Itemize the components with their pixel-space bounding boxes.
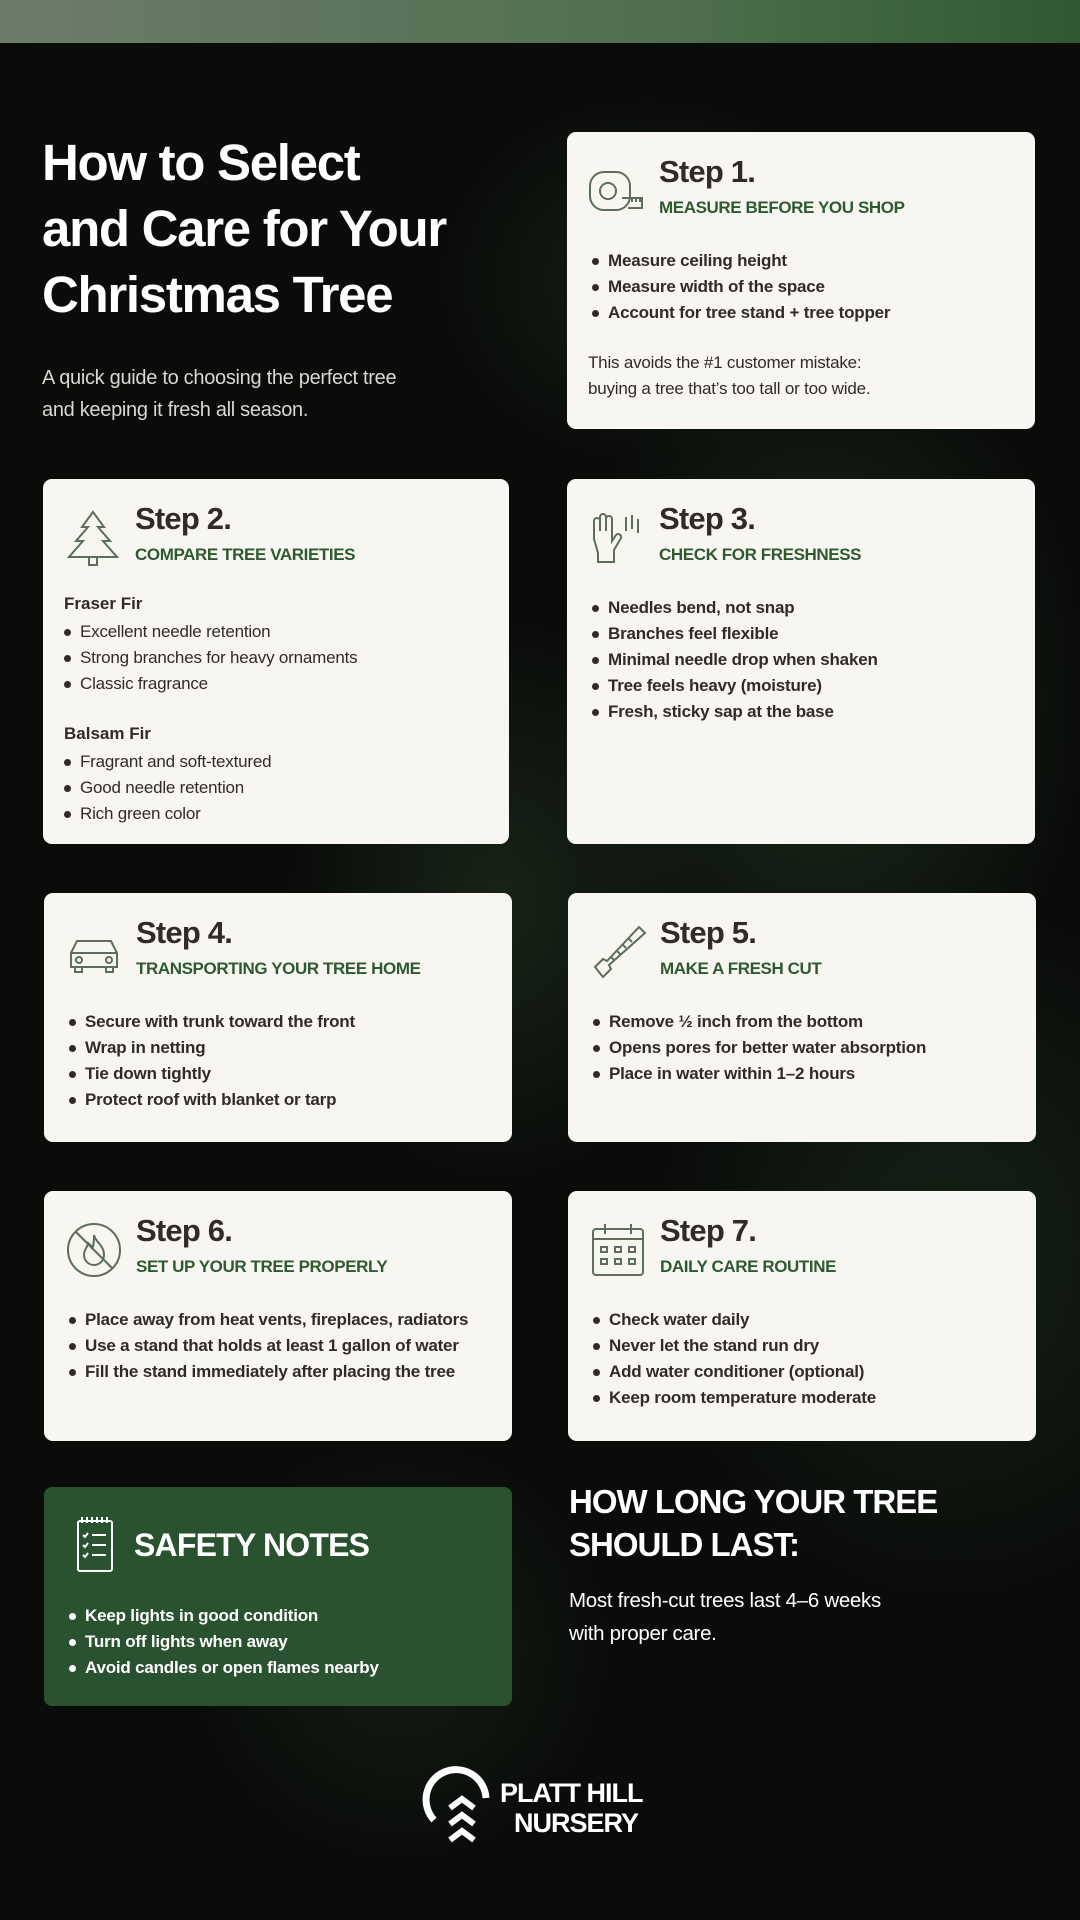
subheading: MEASURE BEFORE YOU SHOP	[659, 198, 905, 217]
bullets: Turn off lights when away	[85, 1632, 287, 1651]
icon: tree	[66, 510, 120, 566]
panel: step 2: Classic fragrance	[80, 674, 208, 693]
bullets	[593, 1310, 876, 1407]
title: Christmas Tree	[42, 266, 392, 323]
note	[588, 353, 870, 398]
subheading: COMPARE TREE VARIETIES	[135, 545, 355, 564]
subheading: SET UP YOUR TREE PROPERLY	[136, 1257, 387, 1276]
heading: Step 3.	[659, 501, 755, 536]
subtitle: and keeping it fresh all season.	[42, 399, 308, 421]
panel: step 3	[567, 479, 1035, 844]
panel: safety notes	[44, 1487, 512, 1706]
icon: gloves	[593, 513, 639, 563]
panel: step 7	[568, 1191, 1036, 1441]
bullets: Place in water within 1–2 hours	[609, 1064, 855, 1083]
bullets: Opens pores for better water absorption	[609, 1038, 926, 1057]
bullets: Fill the stand immediately after placing the tree	[85, 1362, 455, 1381]
panel: step 5	[568, 893, 1036, 1142]
callout: how long	[569, 1483, 937, 1645]
panel: step 2: Fragrant and soft-textured	[80, 752, 271, 771]
bullets	[69, 1310, 468, 1381]
callout: how long: SHOULD LAST:	[569, 1526, 799, 1563]
subheading: MAKE A FRESH CUT	[660, 959, 821, 978]
panel: step 2: Rich green color	[80, 804, 201, 823]
bullets: Add water conditioner (optional)	[609, 1362, 864, 1381]
bullets: Check water daily	[609, 1310, 749, 1329]
bullets: Minimal needle drop when shaken	[608, 650, 878, 669]
subheading: CHECK FOR FRESHNESS	[659, 545, 861, 564]
bullets: Fresh, sticky sap at the base	[608, 702, 834, 721]
title	[42, 134, 446, 323]
bullets: Measure ceiling height	[608, 251, 787, 270]
bullets: Account for tree stand + tree topper	[608, 303, 890, 322]
bullets	[592, 598, 878, 721]
panel: step 2: Good needle retention	[80, 778, 244, 797]
subtitle	[42, 367, 396, 421]
bullets: Use a stand that holds at least 1 gallon of water	[85, 1336, 459, 1355]
panel: step 6	[44, 1191, 512, 1441]
bullets	[593, 1012, 926, 1083]
bullets: Place away from heat vents, fireplaces, radiators	[85, 1310, 468, 1329]
note: buying a tree that’s too tall or too wide.	[588, 379, 870, 398]
note: This avoids the #1 customer mistake:	[588, 353, 861, 372]
heading: Step 4.	[136, 915, 232, 950]
heading: Step 1.	[659, 154, 755, 189]
bullets: Remove ½ inch from the bottom	[609, 1012, 863, 1031]
heading: SAFETY NOTES	[134, 1527, 369, 1563]
bullets: Never let the stand run dry	[609, 1336, 819, 1355]
fraser fir: Fraser Fir	[64, 594, 142, 613]
heading: Step 5.	[660, 915, 756, 950]
bullets: Measure width of the space	[608, 277, 825, 296]
title: and Care for Your	[42, 200, 446, 257]
callout: how long: with proper care.	[569, 1622, 717, 1645]
logo: PLATT HILL	[500, 1778, 642, 1808]
bullets	[69, 1606, 379, 1677]
panel: step 1	[567, 132, 1035, 429]
icon: checklist	[77, 1517, 113, 1572]
heading: Step 7.	[660, 1213, 756, 1248]
panel: step 2	[43, 479, 509, 844]
title: How to Select	[42, 134, 360, 191]
icon: car	[70, 940, 118, 973]
bullets: Branches feel flexible	[608, 624, 778, 643]
heading: Step 2.	[135, 501, 231, 536]
bullets: Tie down tightly	[85, 1064, 211, 1083]
icon: saw	[594, 926, 646, 978]
bullets: Avoid candles or open flames nearby	[85, 1658, 379, 1677]
logo: NURSERY	[514, 1808, 638, 1838]
bullets: Wrap in netting	[85, 1038, 205, 1057]
bullets: Secure with trunk toward the front	[85, 1012, 355, 1031]
bullets: Needles bend, not snap	[608, 598, 794, 617]
panel: step 4	[44, 893, 512, 1142]
subtitle: A quick guide to choosing the perfect tree	[42, 367, 396, 389]
bullets	[69, 1012, 355, 1109]
balsam fir: Balsam Fir	[64, 724, 151, 743]
icon: no fire	[67, 1223, 121, 1277]
subheading: DAILY CARE ROUTINE	[660, 1257, 836, 1276]
subheading: TRANSPORTING YOUR TREE HOME	[136, 959, 421, 978]
bullets: Keep lights in good condition	[85, 1606, 318, 1625]
icon: tape measure	[589, 171, 643, 211]
logo	[422, 1766, 643, 1842]
panel: step 2: Excellent needle retention	[80, 622, 270, 641]
icon: calendar	[592, 1224, 644, 1276]
panel: step 2: Strong branches for heavy ornaments	[80, 648, 357, 667]
callout: how long: Most fresh-cut trees last 4–6 weeks	[569, 1589, 881, 1612]
bullets: Protect roof with blanket or tarp	[85, 1090, 336, 1109]
heading: Step 6.	[136, 1213, 232, 1248]
callout: how long: HOW LONG YOUR TREE	[569, 1483, 937, 1520]
bullets: Keep room temperature moderate	[609, 1388, 876, 1407]
bullets	[592, 251, 890, 322]
bullets: Tree feels heavy (moisture)	[608, 676, 822, 695]
